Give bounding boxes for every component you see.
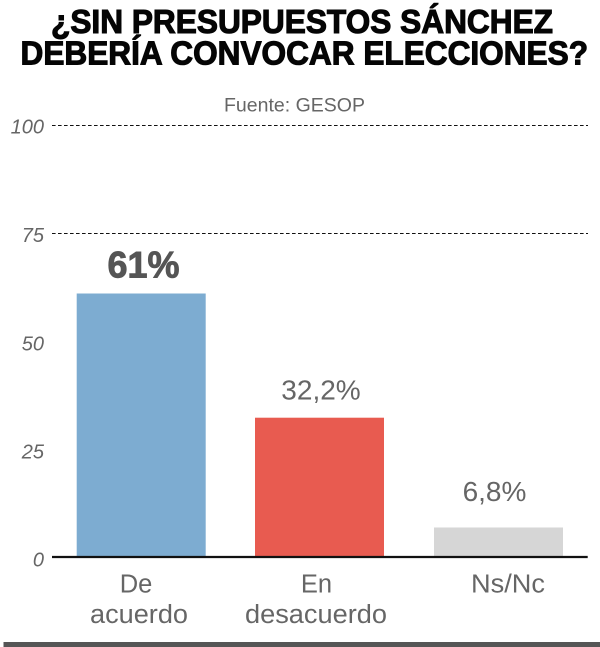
bar: Ns/Nc — [434, 476, 563, 557]
category labels — [90, 570, 545, 629]
title: ¿SIN PRESUPUESTOS SÁNCHEZ — [51, 3, 553, 40]
category labels: De — [120, 570, 152, 598]
x axis baseline — [52, 556, 588, 558]
y axis labels: 75 — [22, 225, 45, 247]
category labels: Ns/Nc — [471, 570, 545, 598]
y axis labels: 50 — [22, 334, 44, 356]
title: DEBERÍA CONVOCAR ELECCIONES? — [20, 34, 588, 72]
y axis labels: 100 — [11, 116, 44, 138]
bar: Ns/Nc: 6,8% — [463, 476, 526, 507]
bottom rule — [4, 642, 600, 647]
y axis labels: 0 — [33, 550, 44, 572]
y axis labels — [11, 116, 45, 572]
category labels: acuerdo — [90, 601, 188, 629]
category labels: desacuerdo — [245, 601, 387, 629]
bar: De acuerdo: 61% — [108, 244, 180, 286]
category labels: En — [301, 570, 332, 598]
bar: De acuerdo — [77, 244, 206, 557]
y axis labels: 25 — [21, 442, 45, 464]
title — [20, 3, 588, 72]
bar: En desacuerdo — [255, 374, 384, 557]
bar: En desacuerdo: 32,2% — [281, 374, 361, 406]
source note: Fuente: GESOP — [224, 96, 365, 116]
